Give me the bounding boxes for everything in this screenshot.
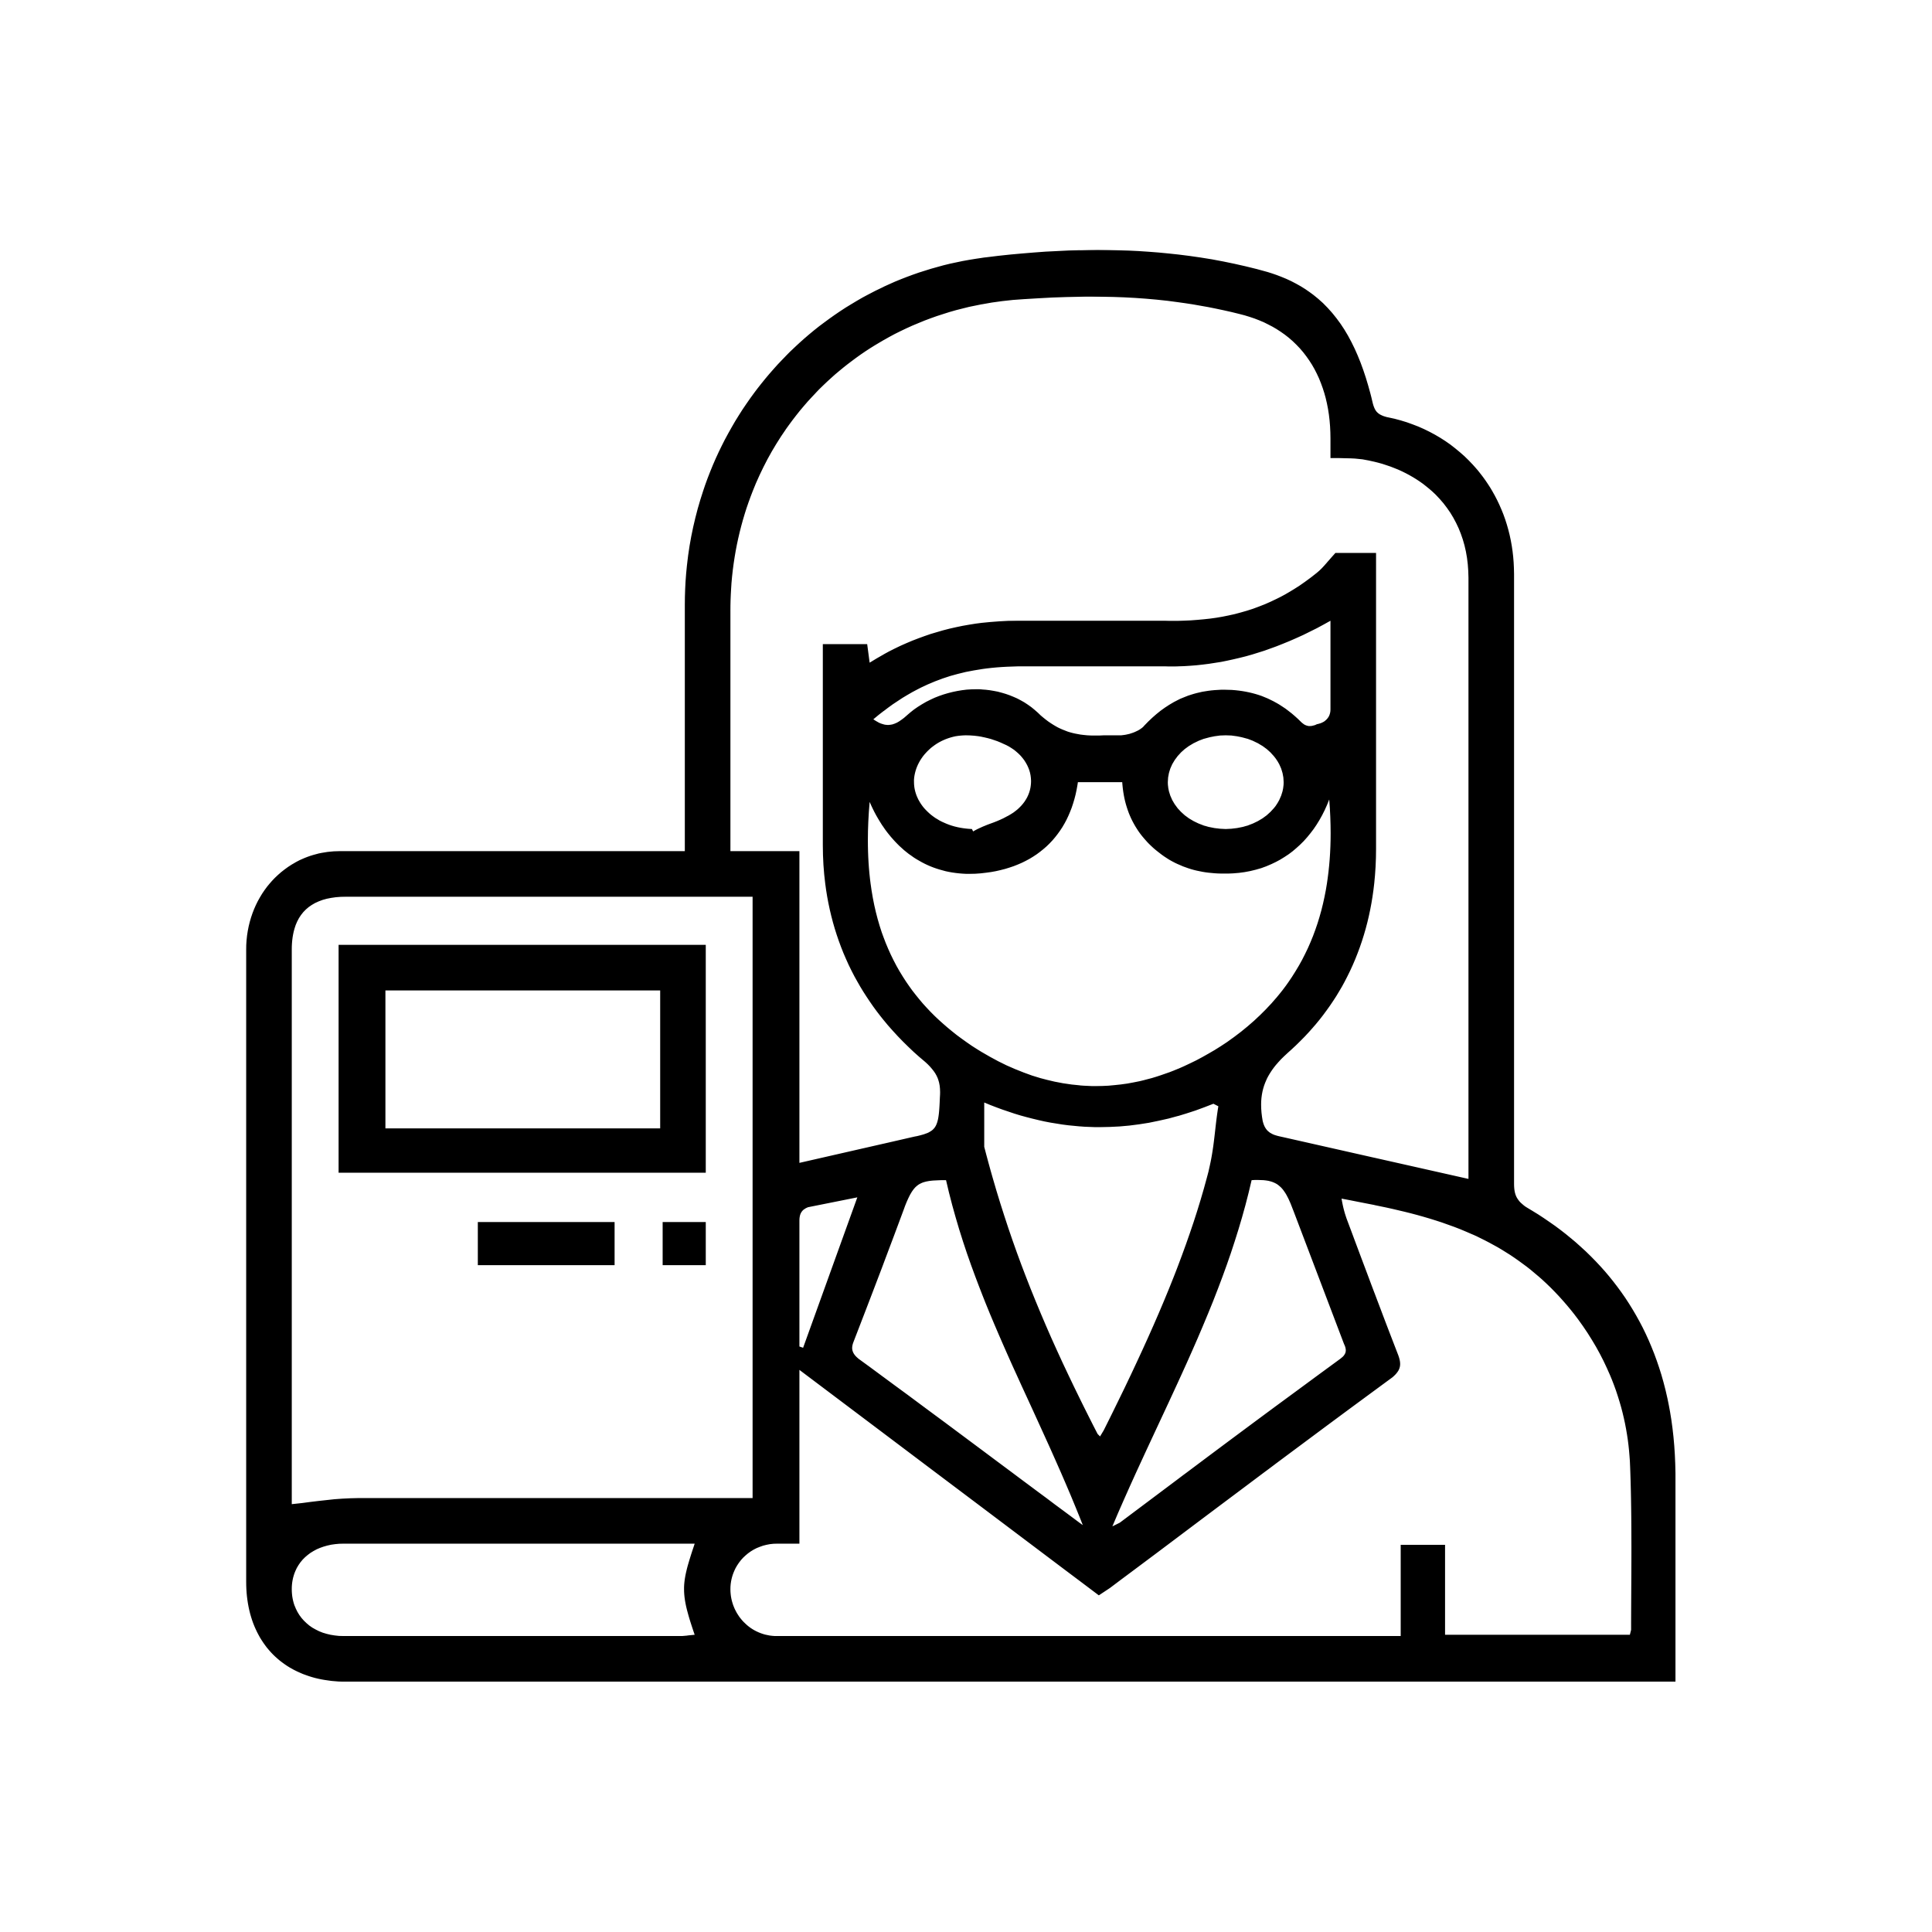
book cover: [292, 896, 753, 1504]
glasses: right lens: [1168, 736, 1284, 829]
icon outer silhouette: [247, 250, 1675, 1682]
hair interior: [730, 297, 1468, 1179]
glasses: left lens: [914, 736, 1031, 832]
jacket: small left panel: [799, 1197, 857, 1348]
forehead: [873, 621, 1331, 736]
jacket: body and sleeve: [730, 1199, 1631, 1636]
book title box: [338, 945, 706, 1173]
jacket: left lapel: [852, 1180, 1083, 1526]
shirt collar: [985, 1103, 1219, 1437]
book text bar: [478, 1222, 614, 1265]
face: [868, 782, 1331, 1086]
book small text bar: [662, 1222, 706, 1265]
jacket: right lapel: [1112, 1180, 1345, 1526]
book pages: [292, 1543, 695, 1636]
